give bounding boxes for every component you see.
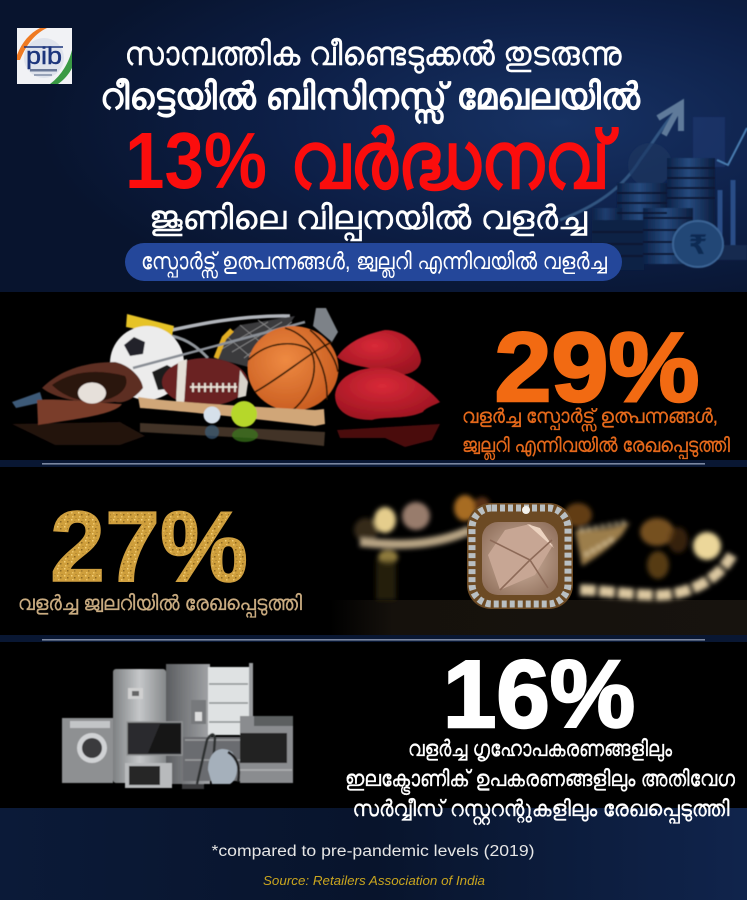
- small balls: [204, 406, 220, 424]
- illustration: rising coins and arrow: [560, 104, 747, 270]
- footnote: *compared to pre-pandemic levels (2019): [212, 843, 534, 860]
- caption: jewellery: വളർച്ച ജ്വലറിയിൽ രേഖപ്പെടുത്തി: [18, 592, 302, 618]
- footer background: [0, 808, 747, 900]
- title line 1: സാമ്പത്തിക വീണ്ടെടുക്കൽ തുടരുന്നു: [124, 35, 622, 74]
- stove: [240, 716, 293, 783]
- racket: [172, 316, 290, 330]
- divider: [42, 463, 705, 465]
- illustration: rising coins and arrow: ₹: [689, 230, 707, 260]
- header background glow: [0, 0, 747, 292]
- television: [127, 722, 182, 755]
- caption: sports line 1: വളർച്ച സ്പോർട്സ് ഉത്പന്നങ്ങൾ,: [462, 406, 718, 431]
- illustration: sports equipment: [12, 308, 440, 447]
- stat: 16 percent: 16%: [443, 641, 635, 748]
- football: [162, 358, 248, 406]
- pill subtitle: [125, 243, 622, 281]
- golf club: [133, 322, 305, 368]
- vacuum cleaner: [197, 734, 215, 784]
- reflections: [12, 422, 145, 445]
- title line 2: റീട്ടെയിൽ ബിസിനസ്സ് മേഖലയിൽ: [100, 76, 641, 126]
- illustration: diamond ring: [330, 495, 747, 635]
- panel: appliances: [0, 641, 747, 825]
- title: [100, 35, 641, 241]
- panel: sports: [0, 292, 747, 460]
- logo: PIB: pib: [26, 43, 62, 70]
- panel: jewellery: [0, 467, 747, 635]
- headline: 13 percent growth: 13%: [125, 116, 267, 205]
- fridge left: [113, 669, 166, 783]
- open fridge door: [208, 667, 250, 735]
- logo: PIB: [17, 28, 72, 84]
- divider: [42, 639, 705, 641]
- caption: appliances line 3: സർവ്വീസ് റസ്റ്ററന്റുകളിലും രേഖപ്പെടുത്തി: [352, 796, 730, 825]
- baseball glove: [12, 392, 43, 408]
- headline: 13 percent growth: വർദ്ധനവ്: [290, 116, 619, 205]
- caption: appliances line 1: വളർച്ച ഗൃഹോപകരണങ്ങളിലും: [408, 736, 673, 762]
- title line 4: ജൂണിലെ വില്പനയിൽ വളർച്ച: [149, 199, 588, 241]
- stat: 27 percent: 27%: [50, 491, 248, 603]
- washing machine: [62, 718, 113, 783]
- source: Source: Retailers Association of India: [263, 874, 485, 888]
- illustration: home appliances: [62, 663, 293, 789]
- basketball: [248, 326, 338, 411]
- stat: 29 percent: 29%: [494, 312, 700, 422]
- soccer ball: [110, 326, 184, 400]
- microwave: [125, 763, 172, 788]
- pill subtitle: സ്പോർട്സ് ഉത്പന്നങ്ങൾ, ജ്വല്ലറി എന്നിവയിൽ വളർച്ച: [141, 248, 607, 278]
- boxing gloves: [337, 330, 421, 375]
- fridge right: [166, 664, 210, 784]
- headline: 13 percent growth: [125, 116, 619, 205]
- bat: [138, 397, 325, 426]
